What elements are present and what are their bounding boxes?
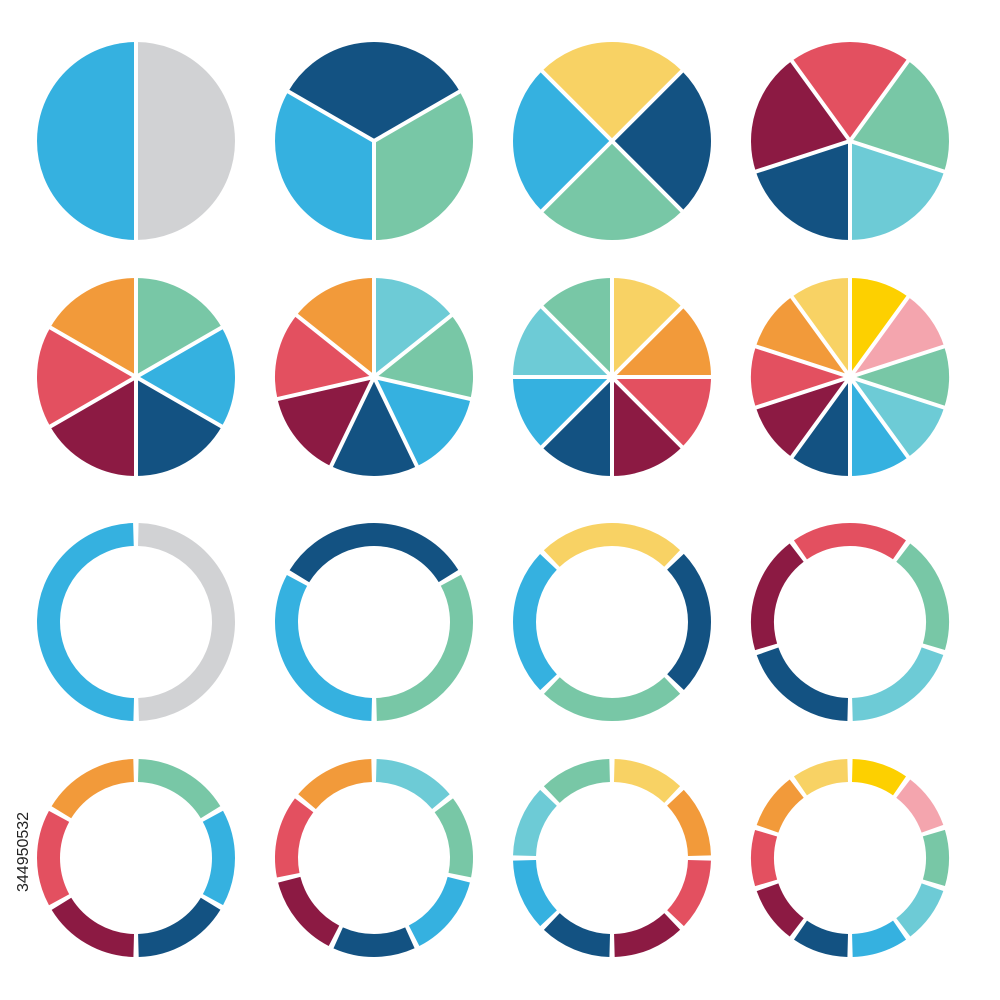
- pie: 6 segments: [48, 275, 224, 479]
- pie: 3 segments: [286, 73, 462, 243]
- ring: 5 segments: [727, 499, 973, 745]
- ring: 8 segments: [488, 734, 736, 982]
- ring: 4 segments: [488, 498, 736, 746]
- pie: 4 segments: [540, 69, 684, 213]
- ring: 2 segments: [46, 532, 226, 712]
- ring: 10 segments: [727, 735, 973, 981]
- ring: 7 segments: [251, 735, 497, 981]
- pie: 7 segments: [275, 275, 473, 469]
- pie: 2 segments: [86, 39, 186, 243]
- pie: 10 segments: [753, 275, 947, 479]
- stock id text: 344950532: [15, 812, 32, 892]
- pie: 8 segments: [510, 275, 714, 479]
- ring: 6 segments: [16, 738, 256, 978]
- ring: 3 segments: [254, 502, 494, 742]
- pie: 5 segments: [753, 58, 947, 243]
